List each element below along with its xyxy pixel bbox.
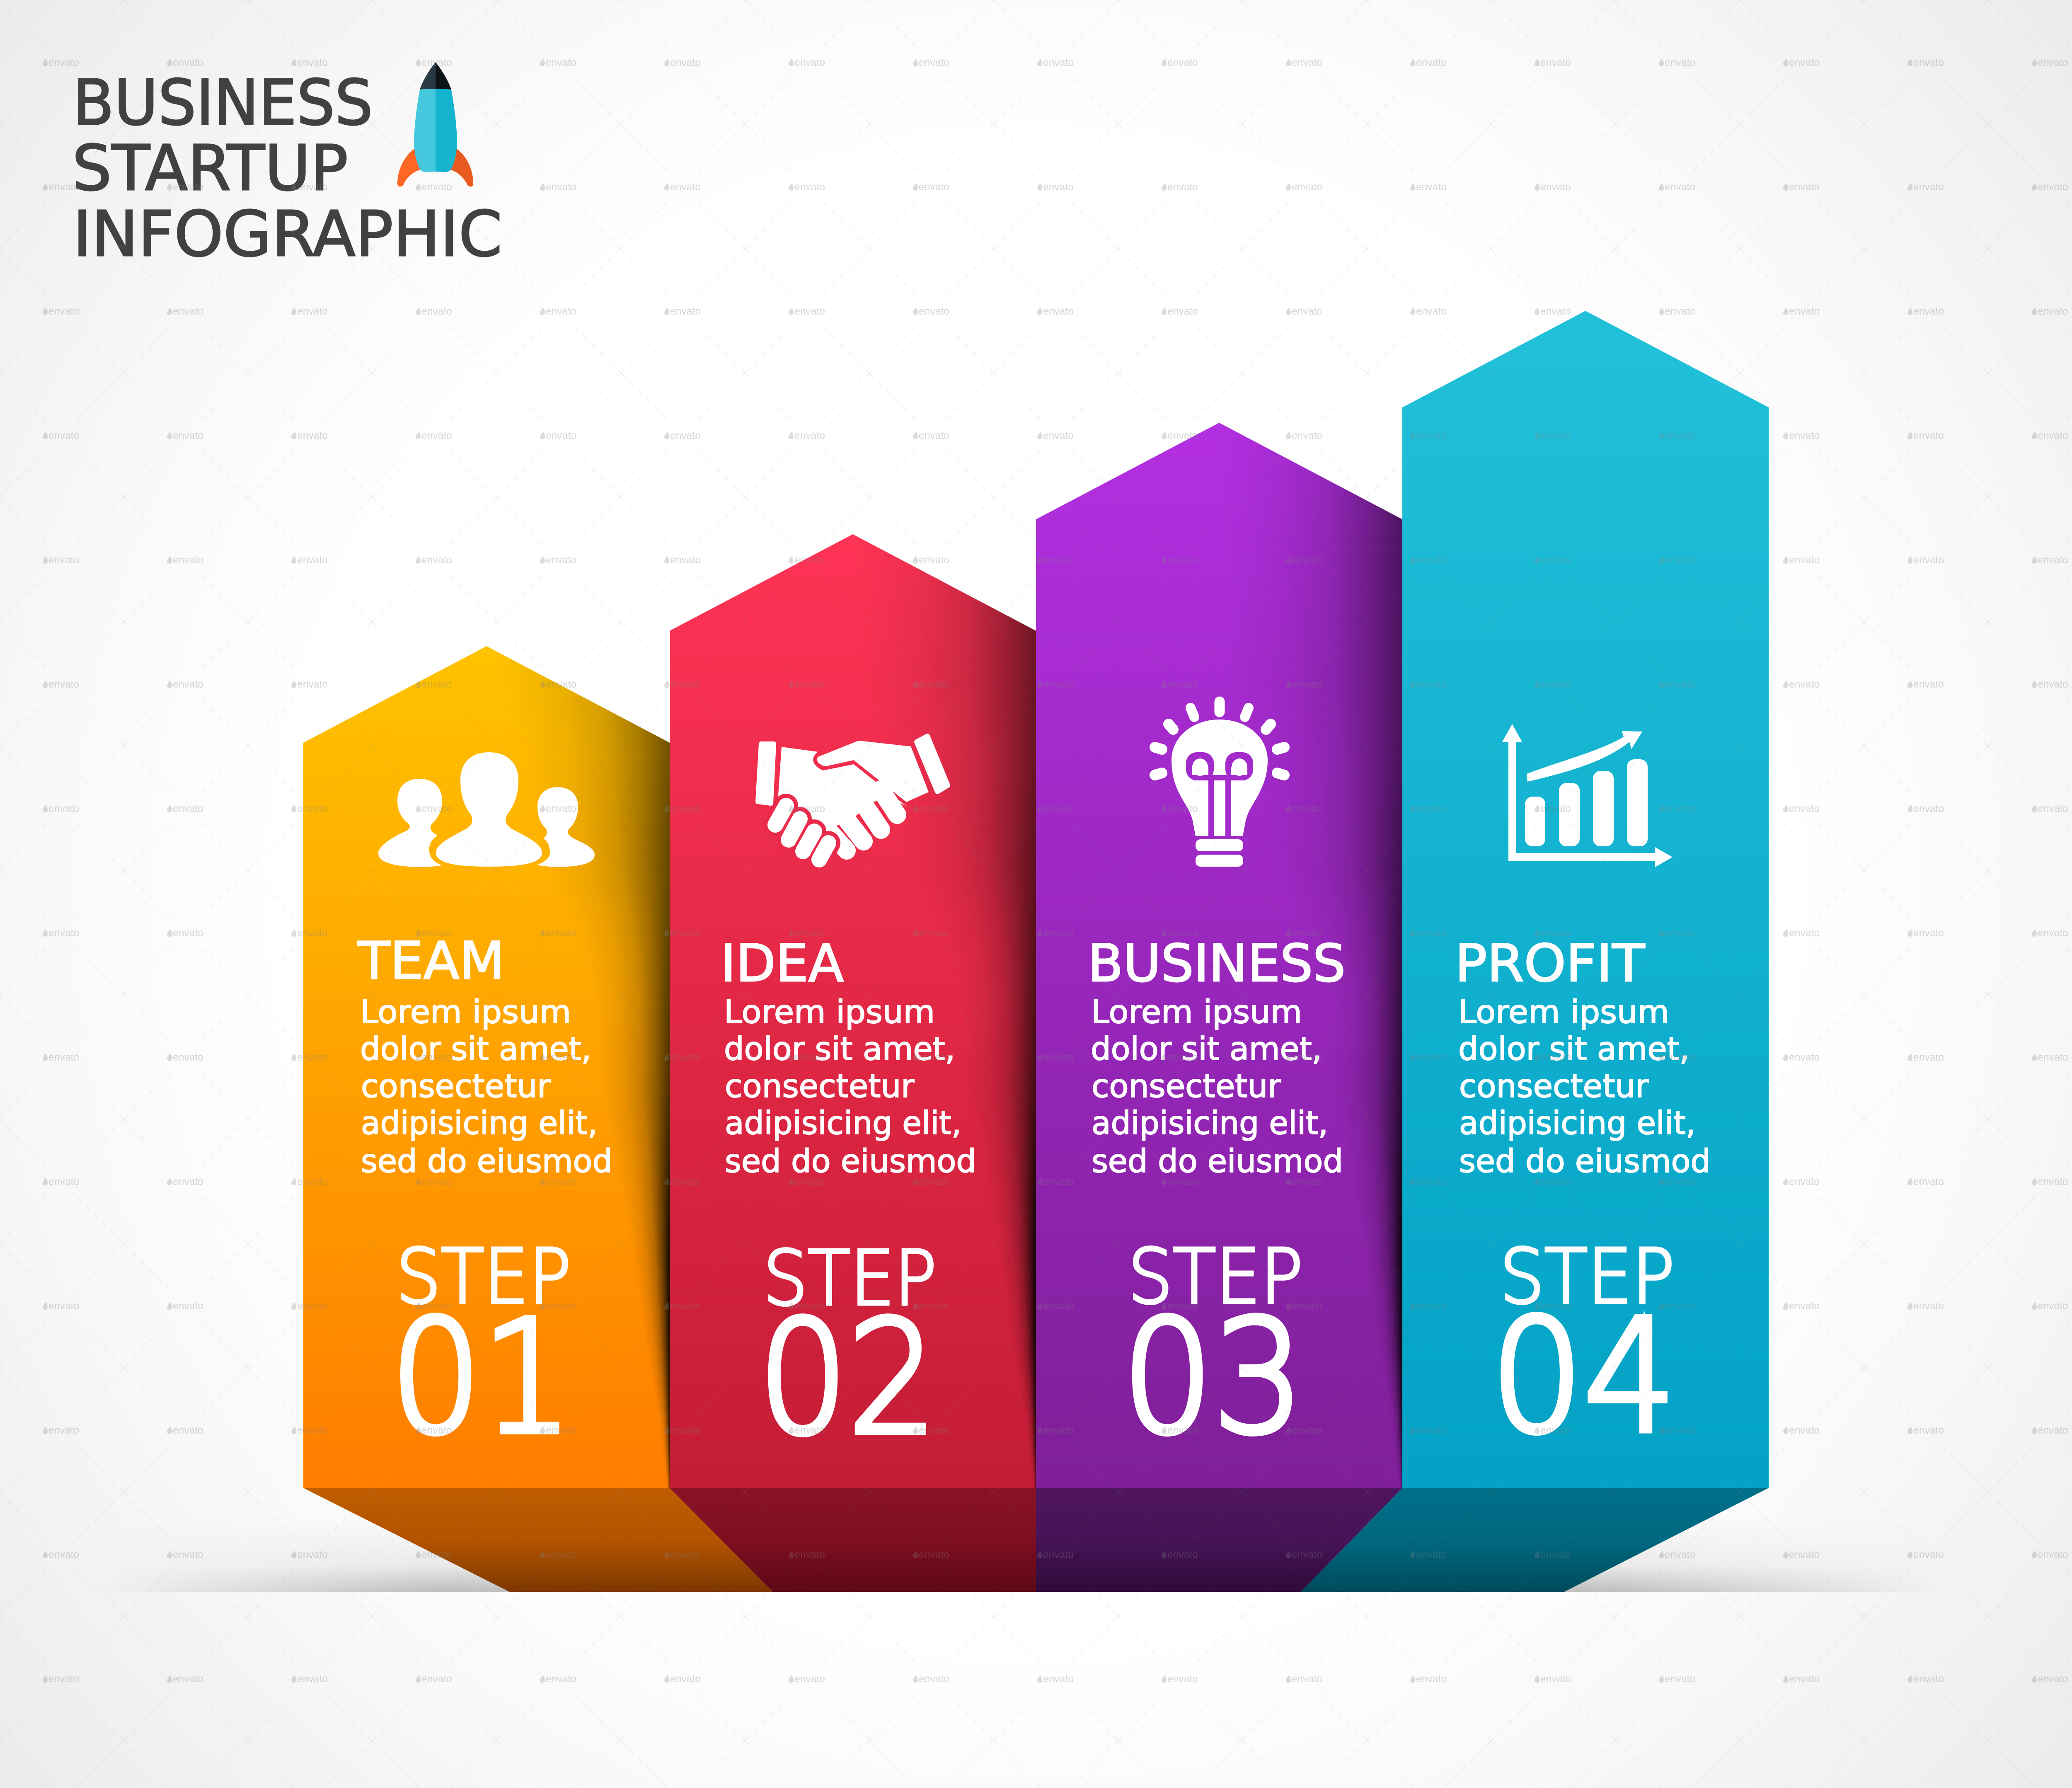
title: BUSINESS <box>73 66 373 139</box>
text block: idea: adipisicing elit, <box>725 1105 961 1142</box>
text block: business <box>1091 994 1343 1180</box>
icon: handshake <box>758 736 948 860</box>
heading: idea: IDEA <box>721 934 844 993</box>
fold: profit bottom <box>1301 1488 1769 1592</box>
text block: business: dolor sit amet, <box>1091 1031 1322 1068</box>
text block: team: adipisicing elit, <box>361 1105 598 1142</box>
heading: profit: PROFIT <box>1455 934 1645 993</box>
icon: growth chart <box>1502 724 1673 867</box>
label: step 01: STEP <box>396 1233 571 1320</box>
text block: business: Lorem ipsum <box>1091 994 1302 1031</box>
arrow column: idea <box>670 534 1036 1488</box>
label: step 03: STEP <box>1128 1233 1303 1320</box>
shadow: team right edge <box>483 414 670 1493</box>
label: step 02: STEP <box>763 1235 937 1322</box>
text block: profit: sed do eiusmod <box>1459 1143 1711 1180</box>
panel: step 01 team <box>303 646 773 1592</box>
shadow: business right edge <box>1216 414 1402 1493</box>
label: step 04: 04 <box>1491 1286 1676 1467</box>
text block: profit: dolor sit amet, <box>1458 1031 1690 1068</box>
icon: light bulb <box>1155 702 1284 867</box>
panel: step 03 business <box>1036 414 1402 1592</box>
label: step 03: 03 <box>1122 1287 1304 1468</box>
fold: business bottom <box>1036 1488 1402 1592</box>
text block: profit <box>1458 994 1711 1180</box>
icon: team people <box>378 752 595 867</box>
title <box>72 66 502 271</box>
heading: business: BUSINESS <box>1088 934 1346 993</box>
arrow column: profit <box>1402 311 1769 1488</box>
label: step 02: 02 <box>758 1288 937 1469</box>
arrow column: business <box>1036 423 1402 1488</box>
text block: business: adipisicing elit, <box>1092 1105 1328 1142</box>
fold: team bottom <box>303 1488 773 1592</box>
text block: profit: Lorem ipsum <box>1458 994 1669 1031</box>
fold: idea bottom <box>670 1488 1036 1592</box>
shadow: idea right edge <box>850 414 1036 1493</box>
panel: step 04 profit <box>1301 311 1769 1592</box>
text block: team: sed do eiusmod <box>361 1143 612 1180</box>
ground shadow <box>145 1543 1902 1592</box>
text block: profit: consectetur <box>1459 1068 1648 1105</box>
arrow column: team <box>303 646 670 1488</box>
label: step 04: STEP <box>1500 1233 1675 1320</box>
text block: idea: sed do eiusmod <box>725 1143 976 1180</box>
title: INFOGRAPHIC <box>73 198 502 271</box>
text block: team <box>360 994 612 1180</box>
text block: idea: dolor sit amet, <box>724 1031 955 1068</box>
text block: idea: Lorem ipsum <box>724 994 935 1031</box>
heading: team: TEAM <box>358 931 505 991</box>
icon: rocket <box>397 62 473 187</box>
title: STARTUP <box>72 132 348 205</box>
text block: team: consectetur <box>361 1068 550 1105</box>
panel: step 02 idea <box>670 414 1036 1592</box>
text block: idea <box>724 994 976 1180</box>
text block: business: sed do eiusmod <box>1092 1143 1343 1180</box>
text block: profit: adipisicing elit, <box>1459 1105 1696 1142</box>
text block: team: Lorem ipsum <box>360 994 571 1031</box>
text block: team: dolor sit amet, <box>360 1031 591 1068</box>
text block: idea: consectetur <box>725 1068 914 1105</box>
text block: business: consectetur <box>1092 1068 1281 1105</box>
label: step 01: 01 <box>390 1287 573 1468</box>
